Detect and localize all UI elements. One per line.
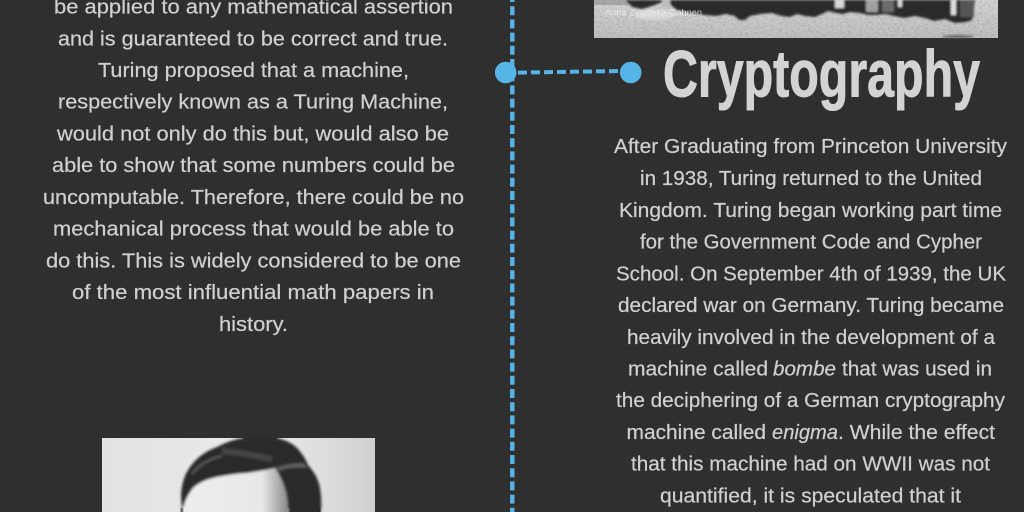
- text block: Cryptography: Kingdom. Turing began working part time: [619, 200, 1002, 222]
- photo: portrait of Alan Turing, cropped at the forehead: [102, 438, 375, 512]
- text block: Turing machine paper: able to show that some numbers could be: [52, 155, 455, 177]
- text block: Turing machine paper: mechanical process that would be able to: [53, 219, 454, 241]
- text block: Turing machine paper: respectively known as a Turing Machine,: [58, 92, 448, 114]
- text block: Cryptography: enigma: [772, 422, 838, 444]
- text block: Turing machine paper: uncomputable. Therefore, there could be no: [43, 187, 464, 209]
- text block: Cryptography: declared war on Germany. Turing became: [618, 295, 1004, 317]
- text block: Cryptography: [614, 136, 1007, 508]
- text block: Turing machine paper: and is guaranteed to be correct and true.: [58, 28, 448, 50]
- text block: Cryptography: . While the effect: [838, 422, 995, 444]
- text block: Cryptography: that was used in: [842, 358, 992, 380]
- text block: Cryptography: the deciphering of a German cryptography: [616, 390, 1005, 412]
- timeline: vertical dashed line: [510, 0, 514, 512]
- timeline connector to Cryptography: [495, 62, 642, 83]
- text block: Cryptography: machine called: [628, 358, 768, 380]
- text block: Cryptography: for the Government Code and Cypher: [640, 232, 982, 254]
- text block: Turing machine paper: [43, 0, 464, 336]
- text block: Cryptography: machine called: [627, 422, 766, 444]
- text block: Cryptography: After Graduating from Princeton University: [614, 136, 1007, 158]
- text block: Cryptography: that this machine had on WWII was not: [631, 454, 990, 476]
- text block: Cryptography: bombe: [773, 358, 836, 380]
- photo caption: Anna Zygalska-Gahnen: [605, 8, 702, 18]
- text block: Turing machine paper: history.: [219, 314, 288, 336]
- text block: Turing machine paper: Turing proposed that a machine,: [98, 60, 409, 82]
- text block: Turing machine paper: of the most influential math papers in: [72, 282, 434, 304]
- text block: Turing machine paper: do this. This is widely considered to be one: [46, 250, 461, 272]
- text block: Cryptography: quantified, it is speculated that it: [660, 486, 961, 508]
- text block: Turing machine paper: would not only do this but, would also be: [56, 124, 449, 146]
- text block: Cryptography: heavily involved in the development of a: [627, 327, 996, 349]
- text block: Cryptography: in 1938, Turing returned to the United: [640, 168, 982, 190]
- text block: Cryptography: School. On September 4th of 1939, the UK: [616, 263, 1007, 285]
- photo: group portrait, cropped at the feet: [594, 0, 998, 38]
